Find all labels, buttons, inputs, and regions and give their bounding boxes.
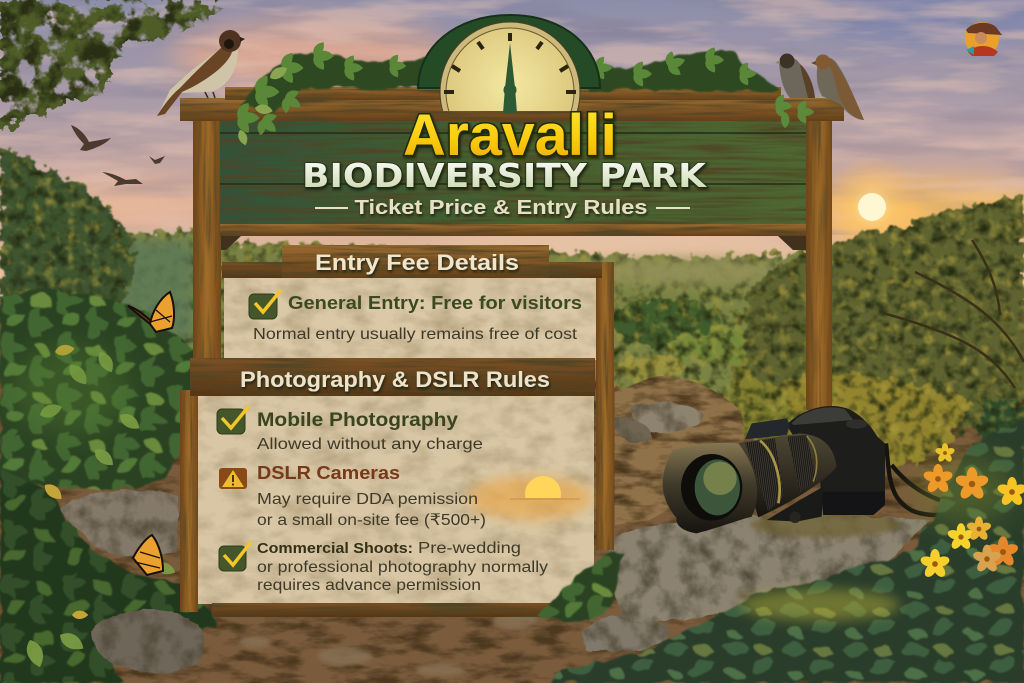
camera body: [745, 406, 885, 523]
commercial shoots: Pre-wedding: [418, 540, 521, 557]
sky background: [0, 0, 1024, 300]
icon: check: [249, 290, 281, 319]
rock moss: [750, 513, 900, 537]
upper rail: [225, 87, 781, 100]
left rocks: [60, 491, 206, 673]
camera strap: [886, 443, 945, 515]
right leaves on sign: [590, 45, 780, 90]
flying birds: [71, 125, 165, 186]
butterfly lower: [133, 535, 163, 575]
dslr note: [257, 491, 486, 529]
butterflies: [128, 292, 174, 575]
sun: [820, 155, 924, 259]
clock: [417, 14, 601, 113]
bird: large left: [157, 30, 245, 117]
top beam: [180, 98, 844, 121]
commercial shoots: requires advance permission: [257, 577, 481, 594]
left post: [193, 118, 221, 363]
left frame post: [180, 390, 198, 612]
commercial shoots: Commercial Shoots:: [257, 541, 413, 557]
foreground rocks: [582, 402, 930, 652]
butterfly upper: [128, 292, 174, 332]
sign birds: [157, 30, 864, 120]
dslr cameras: DSLR Cameras: [257, 463, 400, 483]
photography panel: [180, 358, 595, 617]
bottom rail: [212, 603, 560, 617]
ground stones: [239, 611, 537, 676]
commercial shoots: [257, 540, 548, 594]
small bush by panel: [538, 552, 622, 621]
heading: Entry Fee Details: [315, 250, 519, 275]
commercial shoots: or professional photography normally: [257, 559, 548, 576]
dirt trail: [615, 376, 744, 525]
lens hood: [663, 443, 757, 533]
header plank: [190, 358, 595, 396]
corner braces: [221, 236, 806, 250]
right tree canopy: [745, 195, 1024, 520]
title: Aravalli: [403, 103, 617, 168]
bird: right pair: [775, 54, 864, 120]
entry note: Normal entry usually remains free of cost: [253, 326, 578, 343]
wildflowers: [919, 443, 1024, 579]
mobile photography: Mobile Photography: [257, 410, 458, 431]
green board: [220, 100, 806, 225]
tagline: Ticket Price & Entry Rules: [354, 197, 648, 219]
icon: check: [217, 406, 249, 434]
distant hills and landscape: [100, 230, 1024, 450]
leaves on right beam: [773, 93, 814, 128]
lower rail: [220, 224, 806, 236]
ground base: [0, 370, 1024, 683]
subtitle: BIODIVERSITY PARK: [302, 156, 708, 195]
heading: Photography & DSLR Rules: [240, 367, 550, 392]
right post: [806, 118, 832, 410]
parchment sunset: [468, 476, 592, 520]
camera lens barrel: [735, 433, 837, 517]
wooden signboard: [180, 15, 844, 410]
top-left tree: [0, 0, 222, 128]
bottom-right foliage: [545, 420, 1024, 683]
entry fee panel: [222, 245, 614, 550]
right frame post: [596, 262, 614, 550]
icon: warning: [219, 468, 247, 489]
back rail: [222, 262, 602, 278]
header plank: [282, 245, 549, 278]
logo avatar: [965, 22, 1002, 56]
parchment: [224, 278, 596, 360]
dslr note: May require DDA pemission: [257, 491, 478, 508]
camera: [663, 406, 945, 533]
dslr note: or a small on-site fee (₹500+): [257, 512, 486, 529]
icon: check: [219, 542, 251, 571]
left mid tree: [0, 148, 134, 330]
left leaves on sign: [234, 40, 432, 147]
mobile note: Allowed without any charge: [257, 436, 483, 453]
general entry: General Entry: Free for visitors: [288, 293, 582, 313]
left foliage: [0, 290, 215, 683]
parchment: [198, 396, 594, 604]
